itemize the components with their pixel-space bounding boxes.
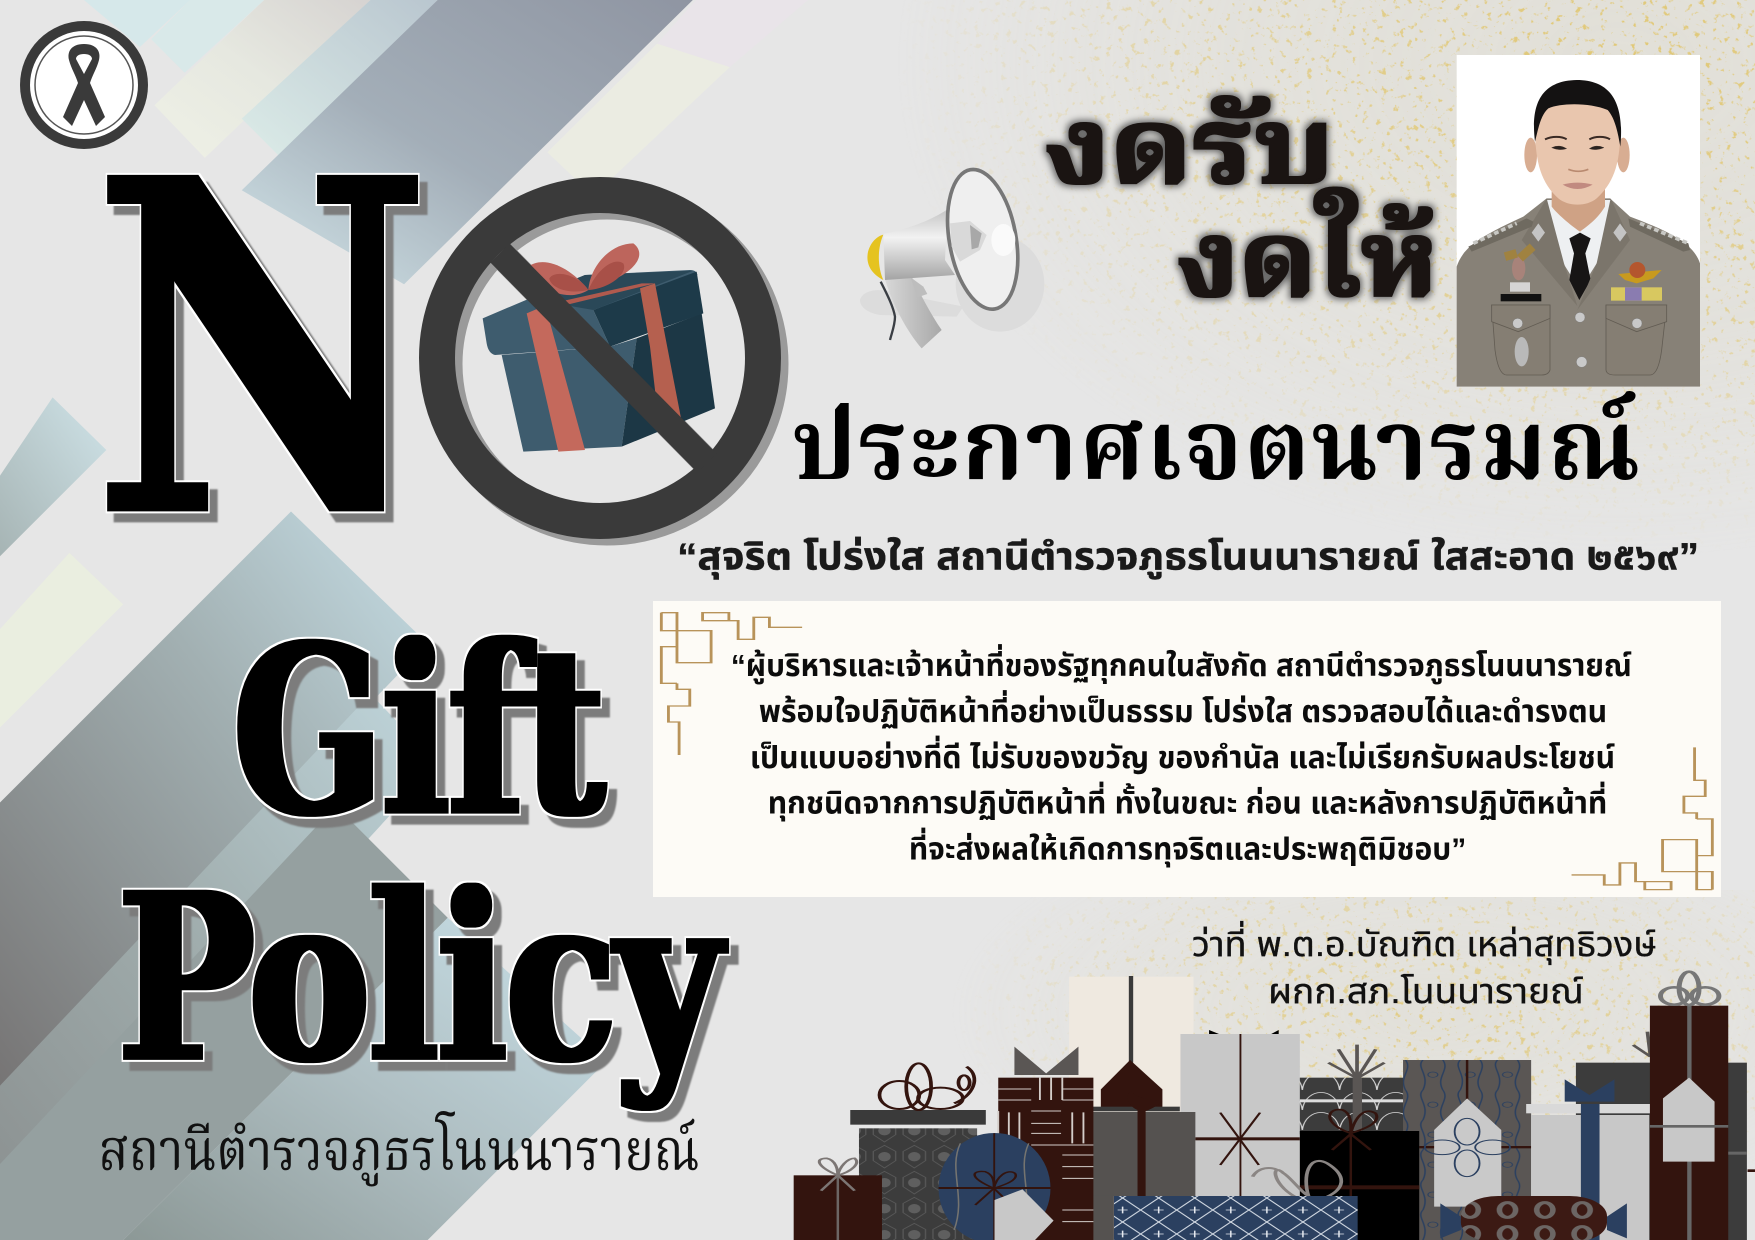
shoulder boards xyxy=(1468,218,1533,252)
icon: megaphone xyxy=(860,164,1044,348)
ears xyxy=(1524,138,1537,172)
statement text: ที่จะส่งผลให้เกิดการทุจริตและประพฤติมิชอบ” xyxy=(909,827,1466,868)
heading: declaration of intent: ประกาศเจตนารมณ์ xyxy=(791,390,1640,501)
insignia and name tag xyxy=(1501,294,1541,301)
hex pattern box with lid xyxy=(850,1063,986,1240)
panel: pledge statement xyxy=(653,601,1721,897)
tall dark brown box xyxy=(1650,972,1755,1240)
oval blue gift with tag xyxy=(939,1133,1054,1240)
gift box xyxy=(483,243,715,452)
light grey box xyxy=(1180,1030,1300,1197)
gold speckle texture, top right xyxy=(928,0,1755,534)
candy shaped gift xyxy=(1440,1196,1627,1240)
slogan quote: “สุจริต โปร่งใส สถานีตำรวจภูธรโนนนารายณ์ ใสสะอาด ๒๕๖๙” xyxy=(677,537,1699,580)
buttons xyxy=(1513,312,1642,367)
ornament: top-left corner xyxy=(661,613,802,755)
blue diamond box xyxy=(1114,1196,1358,1240)
shirt xyxy=(1547,200,1611,290)
signature: officer name and position: ว่าที่ พ.ต.อ.บัณฑิต เหล่าสุทธิวงษ์ xyxy=(1192,921,1657,965)
face xyxy=(1535,97,1620,205)
title word Gift: Gift xyxy=(234,594,604,868)
pockets xyxy=(1492,305,1667,375)
facial features xyxy=(1545,137,1610,171)
ring shadow xyxy=(444,201,770,527)
title letter N: N xyxy=(95,80,429,619)
gold speckle texture, bottom right xyxy=(978,890,1755,1154)
neck xyxy=(1552,180,1605,232)
background diagonal bands xyxy=(0,0,808,1240)
heading: no receiving: งดรับ xyxy=(1045,88,1334,205)
hair xyxy=(1534,80,1621,147)
icon: mourning ribbon badge xyxy=(20,21,148,149)
statement text: เป็นแบบอย่างที่ดี ไม่รับของขวัญ ของกำนัล และไม่เรียกรับผลประโยชน์ xyxy=(750,736,1615,775)
statement text: ทุกชนิดจากการปฏิบัติหน้าที่ ทั้งในขณะ ก่อน และหลังการปฏิบัติหน้าที่ xyxy=(768,782,1607,822)
light box with blue ribbon xyxy=(1526,1079,1654,1240)
heading: no giving: งดให้ xyxy=(1177,188,1437,318)
scallop box xyxy=(1300,1045,1406,1134)
illustration: pile of gifts xyxy=(794,972,1755,1240)
tie xyxy=(1569,233,1591,300)
dark grey box xyxy=(1093,1092,1195,1240)
uniform xyxy=(1457,198,1700,387)
signature: officer name and position xyxy=(1192,921,1657,1011)
dark back box xyxy=(1576,1032,1747,1240)
station name: สถานีตำรวจภูธรโนนนารายณ์ xyxy=(98,1112,700,1187)
title word Policy: Policy xyxy=(119,844,726,1114)
statement text: พร้อมใจปฏิบัติหน้าที่อย่างเป็นธรรม โปร่งใส ตรวจสอบได้และดำรงตน xyxy=(759,690,1607,729)
brick box xyxy=(998,1047,1093,1240)
small brown box xyxy=(794,1158,882,1240)
portrait photo of officer xyxy=(1457,55,1700,387)
wave pattern box xyxy=(1403,1060,1531,1240)
lapels xyxy=(1522,198,1577,306)
black box xyxy=(1253,1110,1419,1240)
icon: prohibited gift xyxy=(437,195,770,527)
ornament: bottom-right corner xyxy=(1572,747,1712,890)
ring and slash xyxy=(437,195,763,521)
statement text: “ผู้บริหารและเจ้าหน้าที่ของรัฐทุกคนในสังกัด สถานีตำรวจภูธรโนนนารายณ์ xyxy=(731,644,1632,684)
signature: officer name and position: ผกก.สภ.โนนนารายณ์ xyxy=(1268,973,1584,1011)
statement text xyxy=(731,644,1632,868)
cream box xyxy=(1069,976,1193,1113)
